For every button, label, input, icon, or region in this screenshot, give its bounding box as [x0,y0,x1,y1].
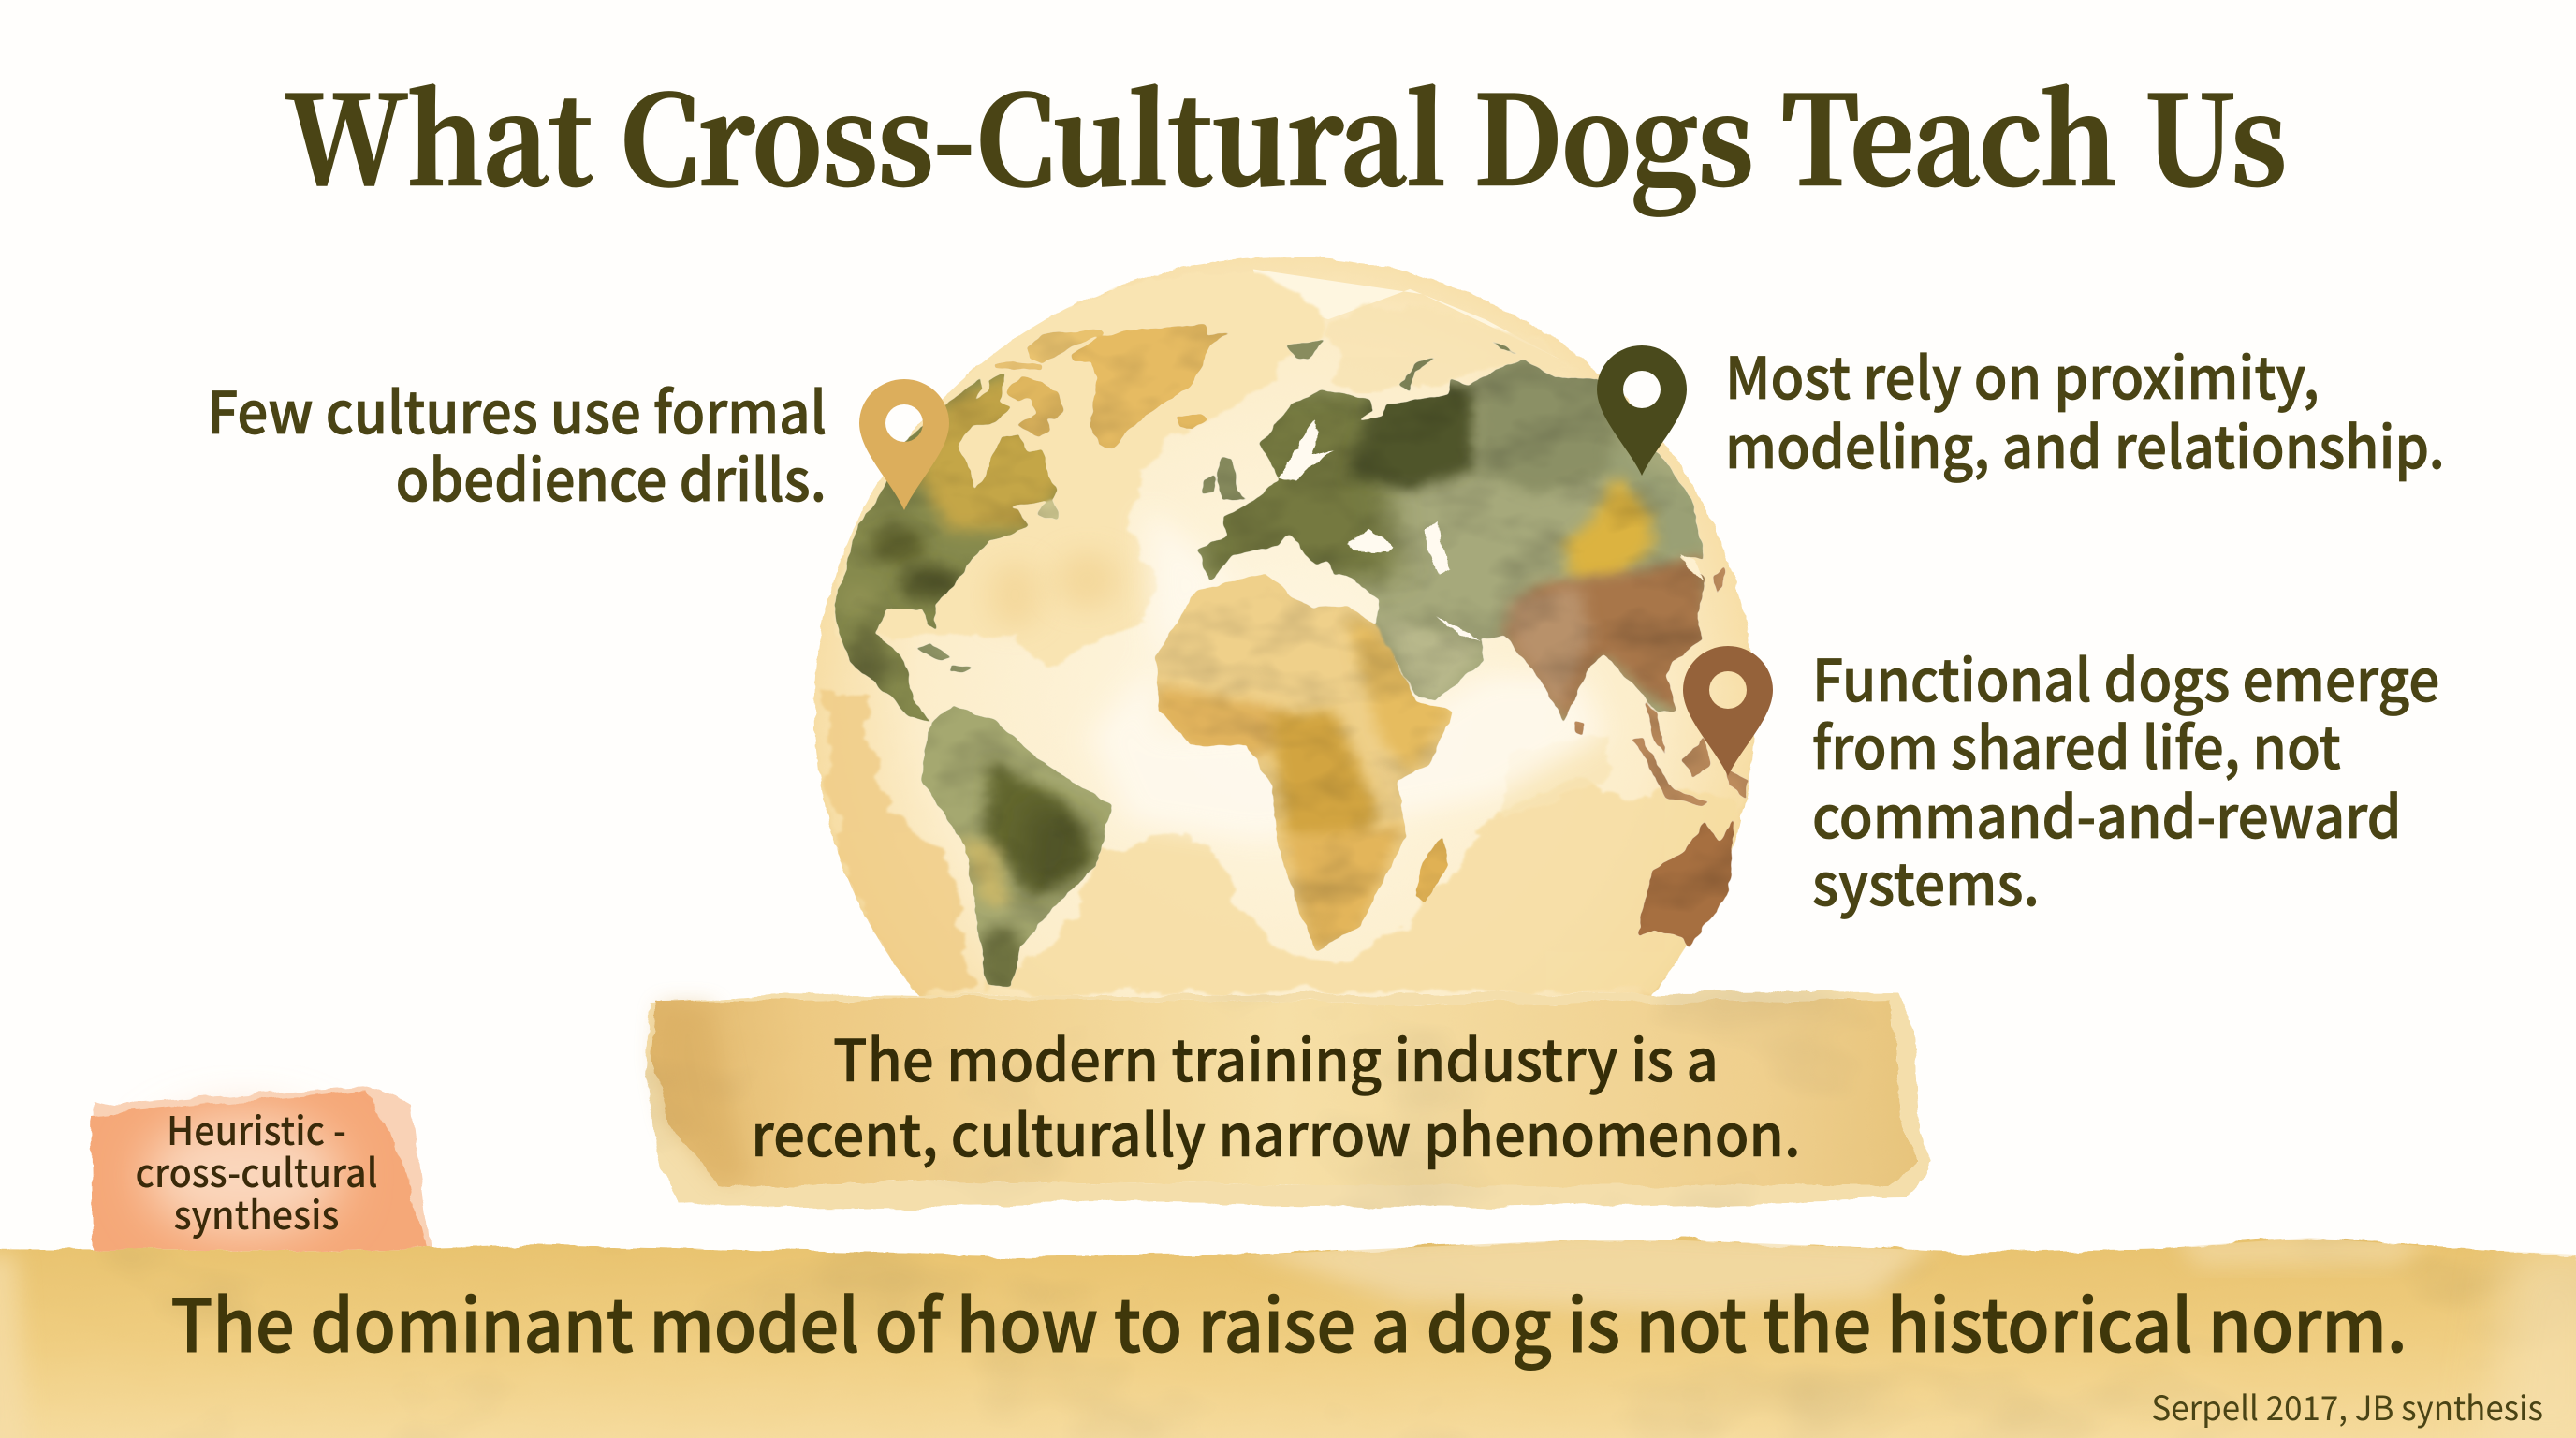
pin: olive, proximity [1597,345,1687,476]
banner: modern training industry [646,992,1930,1208]
callout: functional dogs: systems. [1812,839,2040,923]
bottom band: takeaway [0,1226,2576,1438]
continents [824,325,1749,996]
takeaway text: The dominant model of how to raise a dog is not the historical norm. [170,1268,2408,1373]
callout: functional dogs: Functional dogs emerge [1812,635,2439,719]
tag text: Heuristic - [167,1100,346,1156]
watercolor globe [812,256,1754,998]
islands of Europe [1202,339,1325,500]
banner text: The modern training industry is a [833,1014,1719,1098]
Eurasia [1197,360,1705,721]
callout: formal obedience drills: obedience drills. [396,434,827,519]
Madagascar [1416,836,1447,903]
note: heuristic tag [91,1086,431,1269]
ocean washes [827,269,1742,996]
Australia and Southeast Asia islands [1639,818,1734,948]
callout: proximity and relationship: modeling, and relationship. [1725,402,2445,486]
tag text: synthesis [174,1184,339,1240]
banner text: recent, culturally narrow phenomenon. [751,1089,1801,1173]
globe base wash [814,257,1754,1165]
callout: formal obedience drills: Few cultures use formal [207,367,827,451]
callout: proximity and relationship: Most rely on proximity, [1725,332,2320,417]
pin: brown, shared life [1683,646,1773,776]
callout: functional dogs: from shared life, not [1812,702,2341,786]
title: What Cross-Cultural Dogs Teach Us [285,45,2287,220]
source credit: Serpell 2017, JB synthesis [2151,1382,2543,1431]
callout: functional dogs: command-and-reward [1812,771,2402,856]
inland seas [1279,419,1705,640]
Africa [1155,574,1453,951]
Greenland, arctic islands and North America [824,325,1229,727]
tag text: cross-cultural [136,1142,377,1198]
South America [921,706,1112,987]
pin: gold, formal drills [859,379,949,510]
